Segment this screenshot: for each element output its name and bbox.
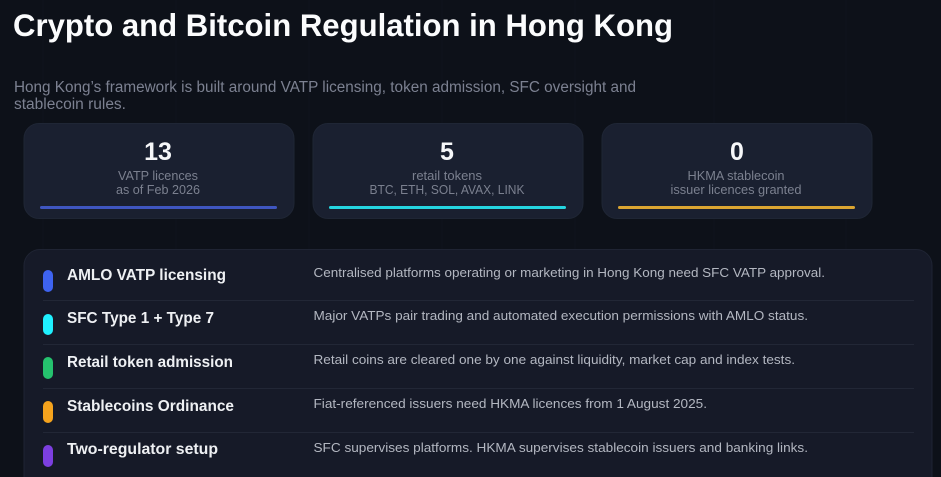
row: AMLO VATP licensing: AMLO VATP licensing [67,267,226,284]
row: Two-regulator setup: Two-regulator setup [67,441,218,458]
subtitle [14,79,636,113]
row: Retail token admission: Retail token admission [67,354,233,371]
panel: VATP licences stat [24,124,294,218]
row: Stablecoins Ordinance: Fiat-referenced issuers need HKMA licences from 1 August 2025. [314,396,707,411]
panel: VATP licences stat: as of Feb 2026 [116,182,200,197]
panel: regulation table [24,250,932,477]
row: Retail token admission: Retail coins are cleared one by one against liquidity, market cap and index tests. [314,352,795,367]
panel: HKMA licences stat: HKMA stablecoin [688,168,784,183]
panel: retail tokens stat [313,124,583,218]
panel: HKMA licences stat: issuer licences granted [670,182,802,197]
row: SFC Type 1 + Type 7: Major VATPs pair trading and automated execution permissions with AMLO status. [314,308,808,323]
row: Stablecoins Ordinance: Stablecoins Ordinance [67,398,234,415]
panel: retail tokens stat: BTC, ETH, SOL, AVAX, LINK [370,182,525,197]
title: Crypto and Bitcoin Regulation in Hong Kong [13,7,673,43]
row: Two-regulator setup [43,440,808,467]
row: Two-regulator setup: SFC supervises platforms. HKMA supervises stablecoin issuers and banking links. [314,440,808,455]
row: Retail token admission [43,352,795,379]
panel: VATP licences stat: VATP licences [118,168,198,183]
row: AMLO VATP licensing [43,265,825,292]
panel: retail tokens stat: 5 [440,138,454,166]
row: AMLO VATP licensing: Centralised platforms operating or marketing in Hong Kong need SFC VATP approval. [314,265,825,280]
panel: retail tokens stat: retail tokens [412,168,482,183]
row: SFC Type 1 + Type 7: SFC Type 1 + Type 7 [67,310,214,327]
subtitle: Hong Kong’s framework is built around VATP licensing, token admission, SFC oversight and [14,79,636,96]
panel: HKMA licences stat: 0 [730,138,744,166]
row: Stablecoins Ordinance [43,396,707,423]
panel: VATP licences stat: 13 [144,138,172,166]
panel: HKMA licences stat [602,124,872,218]
row: SFC Type 1 + Type 7 [43,308,808,335]
subtitle: stablecoin rules. [14,96,126,113]
